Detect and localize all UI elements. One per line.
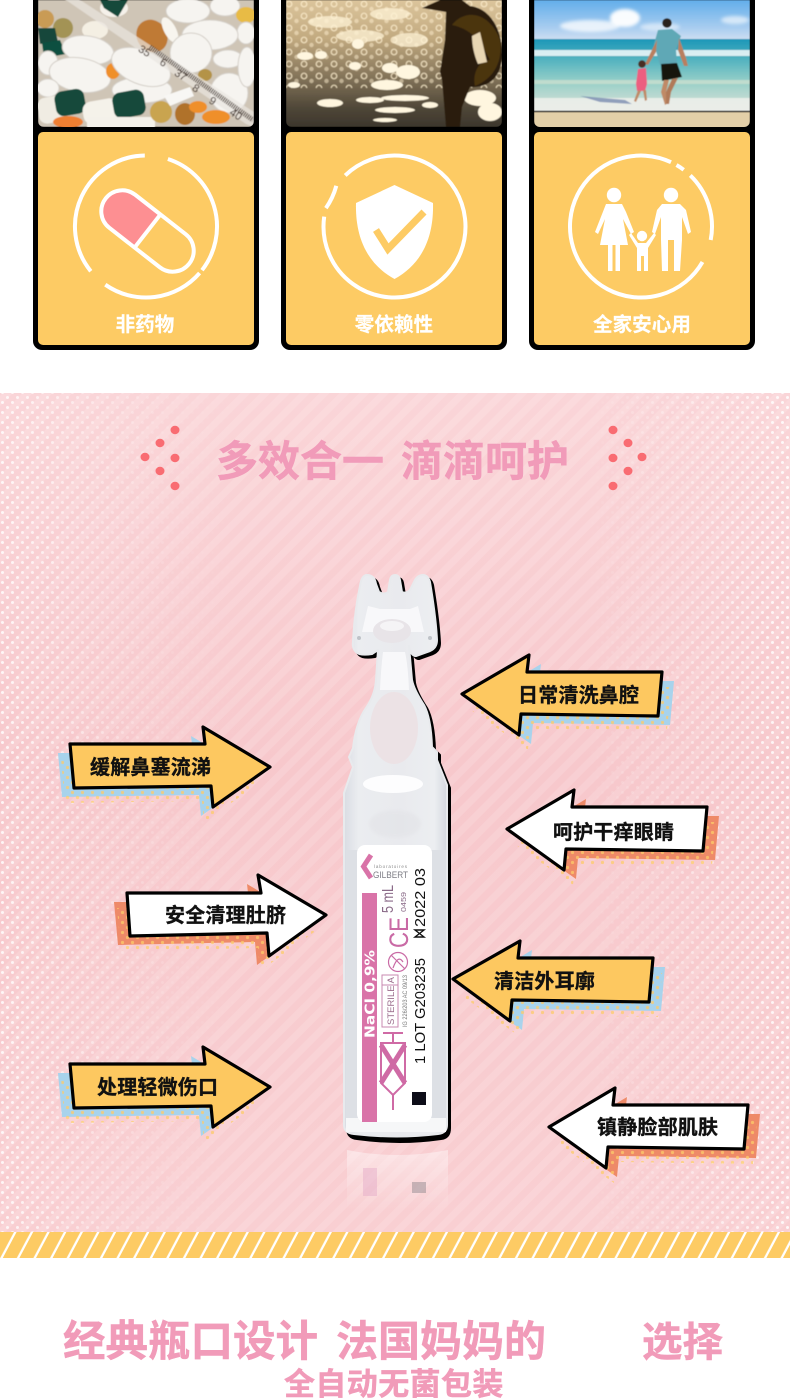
sterile box — [382, 975, 398, 1027]
icon: family in circle — [570, 156, 712, 298]
text: 缓解鼻塞流涕 — [90, 755, 211, 779]
photo: pills and thermometer: 6 — [157, 56, 169, 70]
bottle shadow — [347, 578, 450, 1142]
no reuse mark — [388, 952, 408, 972]
text: 呵护干痒眼睛 — [553, 820, 674, 844]
bottom heading: 选择 — [642, 1319, 723, 1365]
bottle shoulder details — [346, 652, 446, 1132]
bottom heading — [63, 1318, 723, 1366]
black square — [412, 1092, 426, 1105]
photo: silhouette at sparkling water — [286, 0, 502, 127]
text: 日常清洗鼻腔 — [518, 684, 639, 707]
card: family safe — [529, 0, 755, 350]
section title — [216, 438, 569, 485]
label: zero dependence: 零依赖性 — [355, 313, 433, 336]
crossed-out syringe icon — [381, 1033, 405, 1110]
text: 处理轻微伤口 — [97, 1076, 218, 1099]
hourglass icon — [415, 930, 424, 937]
date text: 2022 03 — [412, 868, 429, 927]
Gilbert logo: laboratoires — [374, 864, 408, 869]
photo: pills and thermometer — [36, 0, 256, 128]
volume text: 5 mL — [380, 885, 397, 913]
icon: shield in circle — [324, 156, 465, 297]
panel: pink feature section background — [0, 393, 790, 1232]
bottle cap details — [357, 606, 432, 643]
yellow hatched divider band — [0, 1232, 790, 1258]
bottom heading: 经典瓶口设计 — [63, 1319, 318, 1366]
photo: pills and thermometer: 40 — [227, 107, 244, 123]
icon: left dots decoration — [140, 426, 180, 490]
notified body code: 0459 — [399, 892, 408, 912]
ampoule label — [357, 845, 432, 1122]
photo: father and child on beach — [534, 0, 750, 128]
arrow: daily nasal rinse — [462, 655, 674, 750]
section title: 多效合一 — [216, 438, 384, 485]
label: family safe: 全家安心用 — [593, 313, 691, 336]
card: non-drug — [33, 0, 259, 350]
bottle body — [344, 575, 447, 1136]
photo: pills and thermometer: 8 — [190, 82, 201, 96]
lot text: 1 LOT G203235 — [412, 958, 429, 1064]
pink NaCl band — [362, 893, 377, 1122]
photo: pills and thermometer: 35 — [136, 43, 153, 60]
bottom heading: 法国妈妈的 — [336, 1318, 546, 1365]
NaCl text: NaCl 0,9% — [362, 949, 378, 1038]
photo: pills and thermometer: 9 — [207, 95, 218, 108]
text: 镇静脸部肌肤 — [597, 1115, 718, 1139]
arrow: clean navel safely — [114, 875, 326, 971]
arrow: soothe dry eyes — [507, 790, 719, 885]
text: 清洁外耳廓 — [494, 970, 595, 993]
section title: 滴滴呵护 — [401, 438, 569, 485]
arrow: treat minor wounds — [58, 1047, 270, 1142]
arrow: clean outer ear — [453, 941, 665, 1036]
arrow: calm facial skin — [549, 1088, 760, 1183]
icon: capsule in circle — [75, 156, 217, 298]
ampoule bottle — [344, 575, 450, 1142]
card: zero dependence — [281, 0, 507, 350]
arrow: relieve nasal congestion — [58, 727, 270, 822]
text: 安全清理肚脐 — [165, 903, 286, 927]
CE mark: CE — [384, 917, 414, 948]
photo: pills and thermometer: 37 — [172, 67, 189, 84]
Gilbert logo — [364, 855, 408, 881]
ampoule reflection — [347, 1150, 448, 1210]
batch small text: IG 226/203 AC 09/13 — [403, 974, 409, 1027]
label: non-drug: 非药物 — [116, 313, 174, 336]
Gilbert logo: GILBERT — [373, 870, 408, 881]
icon: right dots decoration — [608, 426, 646, 490]
sterile box: STERILE A — [386, 976, 397, 1025]
